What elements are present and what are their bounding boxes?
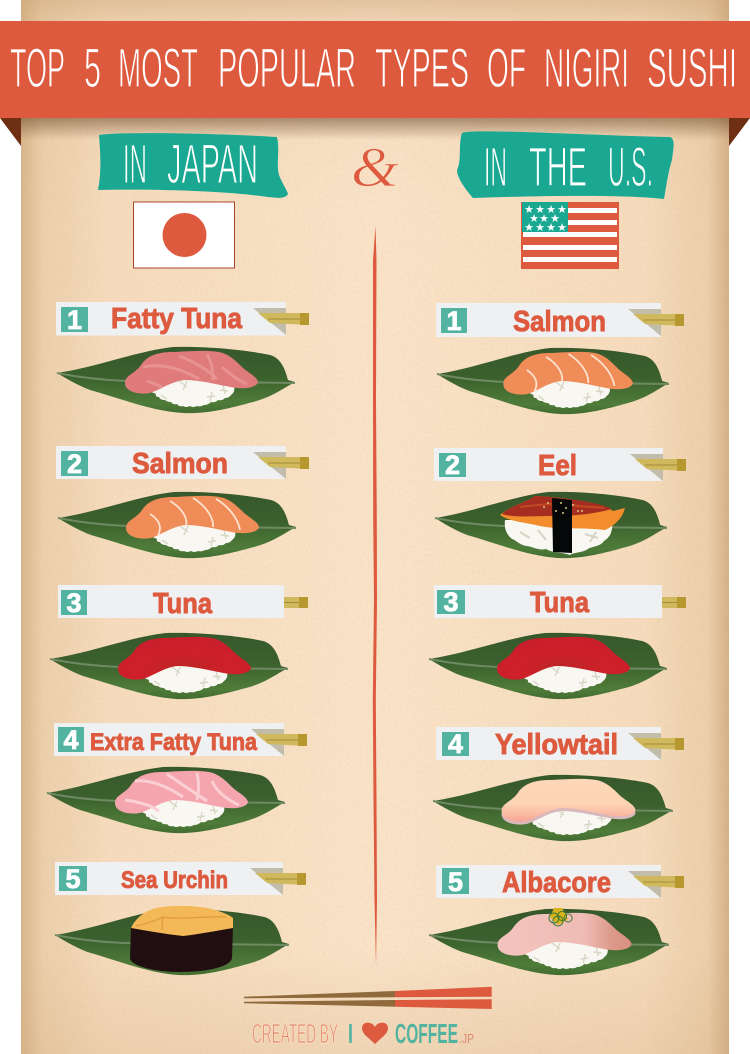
- label: extra fatty tuna: 4: [63, 725, 79, 755]
- label: salmon: 2: [67, 449, 82, 479]
- flag: Japan: [134, 202, 234, 268]
- sushi: extra fatty tuna on leaf: [47, 767, 285, 833]
- sushi: sea urchin on leaf: [55, 906, 289, 975]
- label: salmon: [56, 446, 309, 480]
- title banner: POPULAR: [218, 36, 356, 99]
- flag: United States: ★: [557, 221, 567, 234]
- title banner: MOST: [118, 36, 198, 99]
- Japan rank 1: fatty tuna: [56, 302, 309, 413]
- label: yellowtail: 4: [448, 729, 463, 759]
- badge: in Japan: IN: [123, 132, 147, 195]
- Japan rank 2: salmon: [56, 446, 309, 558]
- title banner: 5: [84, 36, 101, 99]
- label: salmon (US): Salmon: [513, 306, 606, 338]
- US rank 2: eel: [434, 448, 686, 558]
- Japan rank 4: extra fatty tuna: [47, 723, 307, 833]
- label: extra fatty tuna: [54, 723, 307, 756]
- sushi: tuna on leaf (US): [429, 633, 667, 699]
- flag: United States: ★: [535, 221, 545, 234]
- credit line: CREATED BY: [252, 1018, 338, 1049]
- sushi: tuna on leaf: [50, 633, 288, 699]
- flag: United States: ★: [546, 203, 556, 216]
- title banner: TYPES: [375, 36, 469, 99]
- ampersand: &: [351, 137, 399, 199]
- label: fatty tuna: Fatty Tuna: [111, 303, 243, 335]
- center divider: [373, 226, 377, 966]
- label: sea urchin: [55, 862, 306, 895]
- Japan rank 5: sea urchin: [55, 862, 306, 975]
- flag: United States: [521, 202, 619, 269]
- flag: United States: ★: [529, 212, 539, 225]
- sushi: albacore on leaf: [429, 908, 669, 975]
- US rank 4: yellowtail: [433, 727, 684, 841]
- label: yellowtail: [436, 727, 684, 761]
- label: eel: 2: [445, 450, 460, 480]
- title banner: OF: [487, 36, 526, 99]
- flag: United States: ★: [557, 203, 567, 216]
- flag: United States: ★: [539, 212, 549, 225]
- label: fatty tuna: 1: [67, 305, 82, 335]
- credit line: .JP: [459, 1031, 474, 1046]
- badge: in Japan: JAPAN: [167, 132, 258, 195]
- badge: in the U.S.: [457, 131, 674, 199]
- label: tuna: Tuna: [153, 588, 213, 620]
- badge: in the U.S.: THE: [529, 135, 587, 198]
- sushi: eel on leaf: [435, 492, 667, 558]
- US rank 1: salmon: [436, 303, 684, 414]
- label: eel: [434, 448, 686, 482]
- title banner: TOP: [10, 36, 65, 99]
- badge: in the U.S.: IN: [484, 135, 507, 198]
- chopsticks: [244, 987, 492, 1009]
- sushi: fatty tuna on leaf: [57, 347, 295, 413]
- label: sea urchin: Sea Urchin: [121, 867, 228, 894]
- Japan rank 3: tuna: [50, 585, 308, 699]
- flag: United States: ★: [535, 203, 545, 216]
- badge: in the U.S.: U.S.: [608, 135, 653, 198]
- label: salmon (US): 1: [446, 306, 462, 336]
- label: tuna (US): Tuna: [530, 587, 590, 619]
- title banner: [0, 21, 750, 146]
- label: tuna: [58, 585, 308, 620]
- label: fatty tuna: [56, 302, 309, 336]
- sushi: salmon on leaf (US): [437, 348, 669, 414]
- US rank 5: albacore: [429, 865, 684, 975]
- sushi: salmon on leaf: [58, 492, 296, 558]
- label: tuna (US): [434, 585, 686, 619]
- label: eel: Eel: [538, 450, 577, 482]
- flag: United States: ★: [524, 203, 534, 216]
- credit line: I: [348, 1018, 353, 1049]
- label: albacore: [436, 865, 684, 899]
- label: sea urchin: 5: [65, 864, 81, 894]
- sushi: yellowtail on leaf: [433, 775, 673, 841]
- label: albacore: Albacore: [502, 867, 611, 899]
- flag: United States: ★: [524, 221, 534, 234]
- label: salmon (US): [436, 303, 684, 338]
- label: extra fatty tuna: Extra Fatty Tuna: [90, 729, 258, 756]
- flag: United States: ★: [550, 212, 560, 225]
- title banner: NIGIRI: [544, 36, 629, 99]
- label: yellowtail: Yellowtail: [495, 729, 618, 761]
- badge: in Japan: [98, 132, 288, 198]
- label: tuna: 3: [66, 588, 82, 618]
- label: albacore: 5: [448, 867, 463, 897]
- label: salmon: Salmon: [132, 448, 228, 480]
- label: tuna (US): 3: [443, 587, 459, 617]
- US rank 3: tuna: [429, 585, 686, 699]
- flag: United States: ★: [546, 221, 556, 234]
- credit line: COFFEE: [395, 1018, 458, 1049]
